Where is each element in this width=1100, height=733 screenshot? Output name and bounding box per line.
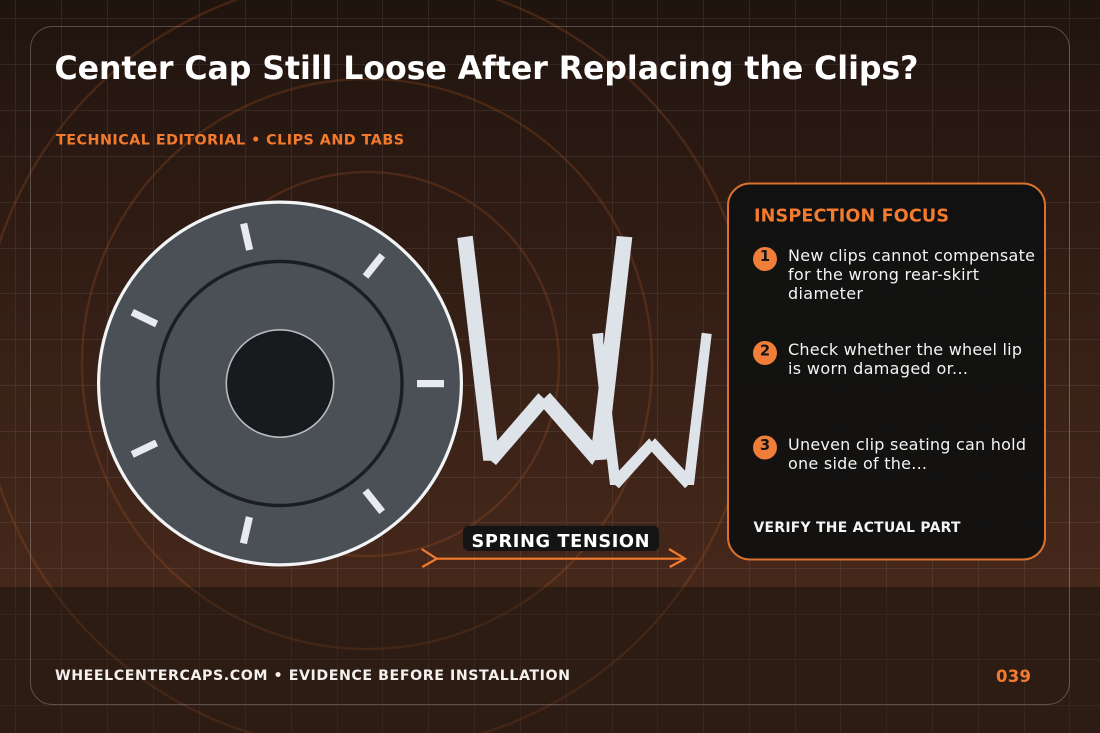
center hub [226, 330, 334, 437]
item 2: Check whether the wheel lip [788, 340, 1022, 359]
subtitle: TECHNICAL EDITORIAL • CLIPS AND TABS [56, 132, 404, 148]
item 1: diameter [788, 284, 863, 303]
title: Center Cap Still Loose After Replacing the Clips? [54, 51, 918, 87]
item 2: is worn damaged or... [788, 359, 968, 378]
spring clips [457, 236, 712, 488]
panel: inspection focus [728, 184, 1045, 560]
item 3: Uneven clip seating can hold [788, 435, 1026, 454]
wheel center cap [99, 202, 461, 565]
spring tension label: SPRING TENSION [472, 531, 650, 552]
item 1: for the wrong rear-skirt [788, 265, 979, 284]
panel heading: INSPECTION FOCUS [754, 207, 949, 227]
item 1: New clips cannot compensate [788, 246, 1035, 265]
page number: 039 [996, 667, 1031, 686]
item 1: 1 [760, 248, 770, 265]
item 3 [753, 435, 1026, 473]
retaining tabs [131, 223, 444, 544]
footer text: WHEELCENTERCAPS.COM • EVIDENCE BEFORE INSTALLATION [55, 668, 570, 684]
spring tension arrow [422, 549, 685, 567]
item 1 [753, 246, 1035, 303]
item 2: 2 [760, 342, 770, 360]
item 3: one side of the... [788, 454, 927, 473]
cap body [99, 202, 461, 565]
panel footer note: VERIFY THE ACTUAL PART [754, 520, 961, 536]
item 2 [753, 340, 1022, 378]
inner ring [158, 262, 402, 506]
item 3: 3 [760, 437, 770, 454]
